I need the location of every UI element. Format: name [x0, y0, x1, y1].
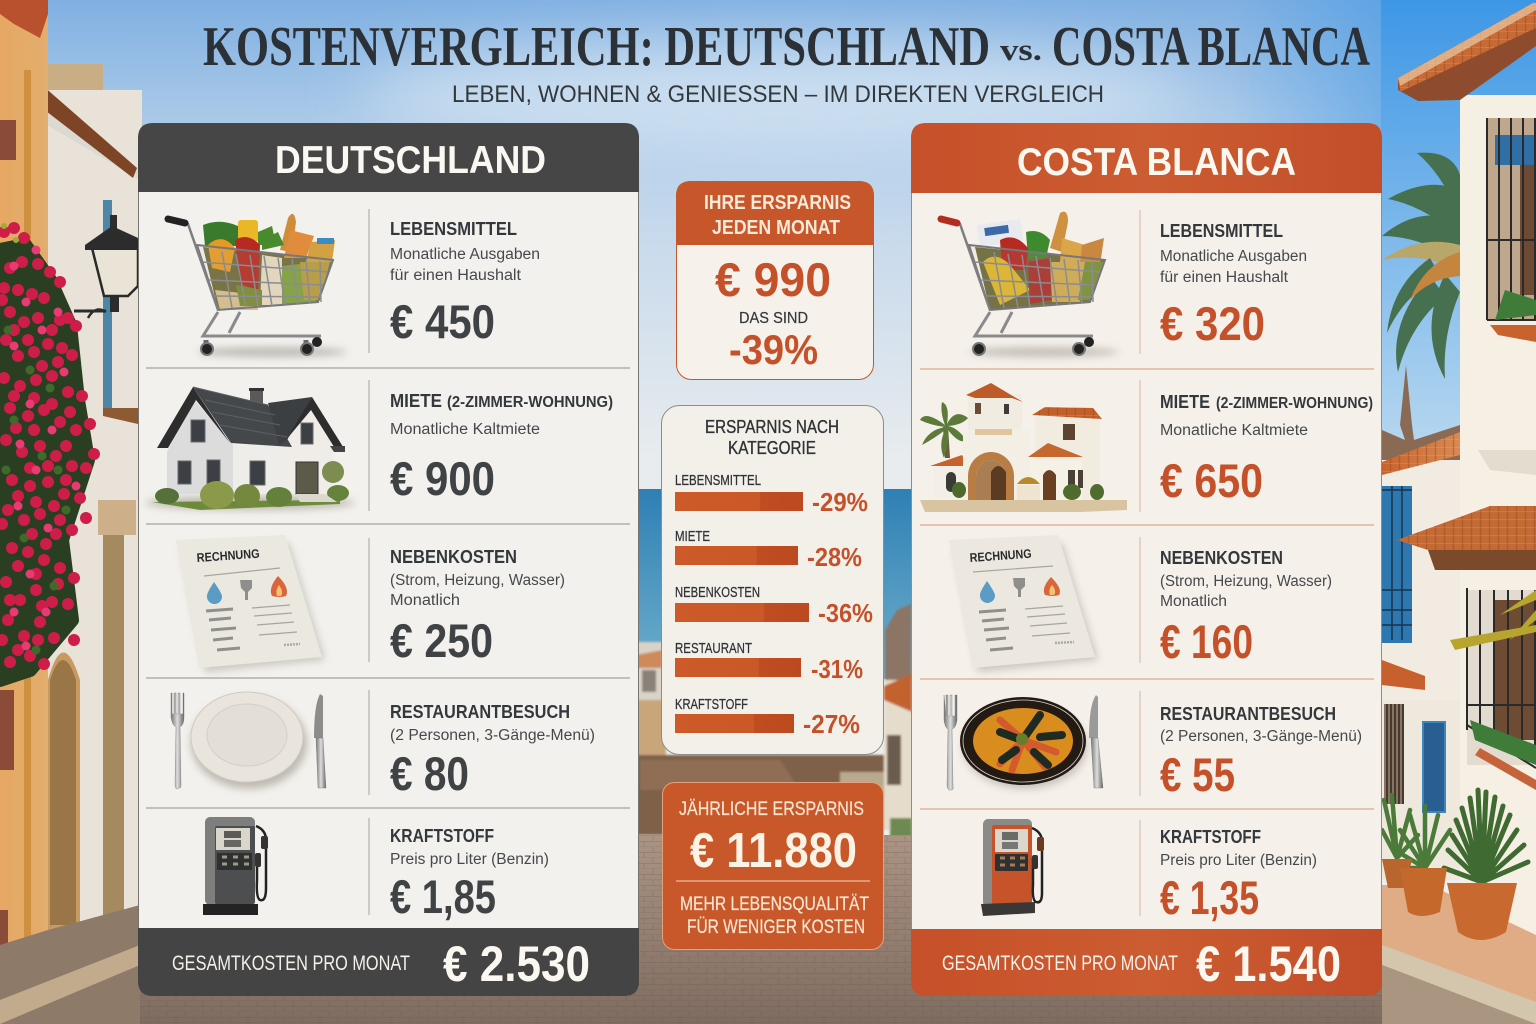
annual savings label: JÄHRLICHE ERSPARNIS — [679, 798, 864, 820]
icon: palm tree — [1382, 153, 1460, 379]
price: € 160 — [1160, 615, 1253, 668]
bar: Nebenkosten: -36% — [818, 598, 873, 628]
item description: (2 Personen, 3-Gänge-Menü) — [1160, 728, 1362, 745]
icon: fuel pump red — [981, 819, 1044, 916]
row: Lebensmittel Deutschland — [168, 214, 540, 357]
bar: Kraftstoff — [675, 697, 860, 739]
bar: Miete: MIETE — [675, 529, 710, 545]
chart heading — [705, 416, 839, 458]
item description — [1160, 573, 1332, 610]
row: Lebensmittel Costa Blanca — [941, 212, 1307, 357]
subtitle: LEBEN, WOHNEN & GENIESSEN – IM DIREKTEN VERGLEICH — [452, 81, 1104, 108]
item title: RESTAURANTBESUCH — [1160, 704, 1336, 724]
item description: für einen Haushalt — [1160, 269, 1289, 286]
item title: KRAFTSTOFF — [1160, 827, 1261, 847]
footer: Gesamtkosten Deutschland: € 2.530 — [443, 936, 590, 992]
background: potted plants — [1382, 790, 1528, 940]
background: sea — [620, 489, 930, 679]
item description: (Strom, Heizung, Wasser) — [1160, 573, 1332, 590]
item description: Monatliche Ausgaben — [390, 246, 540, 263]
background: cobbled street — [0, 835, 1536, 1024]
item title — [1160, 392, 1373, 412]
panel: Costa Blanca — [911, 123, 1382, 996]
title: KOSTENVERGLEICH: DEUTSCHLAND — [203, 16, 990, 78]
item description: Preis pro Liter (Benzin) — [390, 851, 549, 868]
background: middle roof — [1397, 506, 1536, 562]
item description: (2 Personen, 3-Gänge-Menü) — [390, 727, 595, 744]
icon: invoice — [949, 535, 1098, 672]
item description: Monatlich — [1160, 593, 1227, 610]
bar: Restaurant: -31% — [811, 654, 863, 684]
background: terrace paving — [1382, 885, 1536, 1024]
panel: monatliche Ersparnis — [676, 181, 874, 380]
price: € 55 — [1160, 748, 1235, 801]
item description: Monatliche Ausgaben — [1160, 248, 1307, 265]
price: € 1,35 — [1160, 871, 1259, 924]
item title: KRAFTSTOFF — [390, 826, 494, 846]
bar: Miete — [675, 529, 862, 572]
icon: shopping cart full — [941, 212, 1119, 357]
icon: bougainvillea flowers — [0, 226, 94, 680]
item title: MIETE — [1160, 392, 1210, 412]
footer: Gesamtkosten Deutschland — [138, 928, 639, 996]
item description — [390, 572, 565, 609]
chart heading: KATEGORIE — [728, 437, 816, 458]
item title — [390, 391, 613, 411]
price: € 650 — [1160, 454, 1263, 507]
annual savings note: MEHR LEBENSQUALITÄT — [680, 894, 869, 915]
header: Costa Blanca: COSTA BLANCA — [1017, 141, 1296, 184]
footer: Gesamtkosten Costa Blanca: € 1.540 — [1196, 936, 1341, 992]
icon: street lamp — [74, 215, 138, 318]
icon: invoice — [176, 535, 325, 672]
savings percent: -39% — [729, 326, 818, 373]
title: COSTA BLANCA — [1052, 16, 1370, 78]
bar: Nebenkosten — [675, 585, 873, 628]
price: € 1,85 — [390, 870, 496, 923]
bar: Nebenkosten: NEBENKOSTEN — [675, 585, 760, 601]
bar chart — [675, 473, 873, 739]
icon: invoice: RECHNUNG — [196, 547, 260, 565]
item description: (Strom, Heizung, Wasser) — [390, 572, 565, 589]
row: Restaurantbesuch Deutschland — [171, 692, 595, 800]
item description: Monatlich — [390, 592, 460, 609]
item description — [390, 246, 540, 284]
item title: RESTAURANTBESUCH — [390, 702, 570, 722]
icon: fuel pump grey — [203, 817, 268, 915]
background: right buildings — [1382, 3, 1536, 1024]
bar: Restaurant: RESTAURANT — [675, 641, 752, 657]
panel: jährliche Ersparnis — [662, 782, 884, 950]
item title: NEBENKOSTEN — [1160, 548, 1283, 568]
annual savings amount: € 11.880 — [690, 824, 857, 878]
footer: Gesamtkosten Deutschland: GESAMTKOSTEN PRO MONAT — [172, 952, 410, 975]
row: Kraftstoff Deutschland — [203, 817, 549, 923]
price: € 450 — [390, 295, 495, 348]
bar: Kraftstoff: -27% — [803, 709, 860, 739]
bar: Miete: -28% — [807, 542, 862, 572]
bar: Lebensmittel: LEBENSMITTEL — [675, 473, 761, 489]
callout header: JEDEN MONAT — [712, 217, 840, 239]
background: top roof — [1398, 3, 1536, 101]
panel: Deutschland — [138, 123, 639, 996]
row: Miete Costa Blanca — [920, 383, 1373, 512]
chart heading: ERSPARNIS NACH — [705, 416, 839, 437]
icon: shopping cart — [168, 214, 347, 357]
savings amount: € 990 — [715, 253, 831, 306]
icon: empty plate with cutlery — [171, 692, 326, 789]
icon: paella with cutlery — [944, 695, 1103, 790]
row: Kraftstoff Costa Blanca — [981, 819, 1317, 924]
price: € 80 — [390, 747, 469, 800]
item title: LEBENSMITTEL — [390, 219, 517, 239]
background: lower window — [1450, 588, 1536, 790]
background: town and cliff — [636, 604, 924, 840]
item description: Preis pro Liter (Benzin) — [1160, 852, 1317, 869]
panel: Ersparnis nach Kategorie — [662, 406, 884, 754]
background: upper window — [1487, 118, 1536, 342]
row: Restaurantbesuch Costa Blanca — [944, 695, 1362, 801]
item title: (2-ZIMMER-WOHNUNG) — [447, 394, 613, 411]
savings note: DAS SIND — [739, 310, 808, 327]
item description: Monatliche Kaltmiete — [390, 421, 540, 438]
row: Nebenkosten Costa Blanca — [949, 535, 1332, 672]
item description: für einen Haushalt — [390, 267, 522, 284]
icon: invoice: RECHNUNG — [969, 547, 1032, 565]
footer: Gesamtkosten Costa Blanca: GESAMTKOSTEN PRO MONAT — [942, 952, 1178, 975]
annual savings note — [680, 894, 869, 938]
header: Deutschland: DEUTSCHLAND — [275, 139, 546, 182]
annual savings note: FÜR WENIGER KOSTEN — [687, 917, 865, 938]
bar: Kraftstoff: KRAFTSTOFF — [675, 697, 748, 713]
bar: Restaurant — [675, 641, 863, 684]
title: vs. — [1000, 32, 1042, 67]
item description — [1160, 248, 1307, 286]
icon: house — [145, 387, 355, 510]
callout header — [676, 181, 874, 245]
item title: MIETE — [390, 391, 442, 411]
header: Deutschland — [138, 123, 639, 192]
bar: Lebensmittel: -29% — [812, 487, 868, 517]
bar: Lebensmittel — [675, 473, 868, 517]
row: Nebenkosten Deutschland — [176, 535, 565, 672]
background: left buildings — [0, 0, 143, 1024]
price: € 320 — [1160, 297, 1265, 350]
header: Costa Blanca — [911, 123, 1382, 193]
item description: Monatliche Kaltmiete — [1160, 422, 1308, 439]
callout header: IHRE ERSPARNIS — [704, 192, 851, 214]
item title: LEBENSMITTEL — [1160, 221, 1283, 241]
row: Miete Deutschland — [145, 387, 613, 510]
price: € 900 — [390, 452, 495, 505]
footer: Gesamtkosten Costa Blanca — [911, 929, 1382, 996]
icon: Spanish villa — [920, 383, 1127, 512]
item title: (2-ZIMMER-WOHNUNG) — [1216, 395, 1373, 412]
item title: NEBENKOSTEN — [390, 547, 517, 567]
price: € 250 — [390, 614, 493, 667]
